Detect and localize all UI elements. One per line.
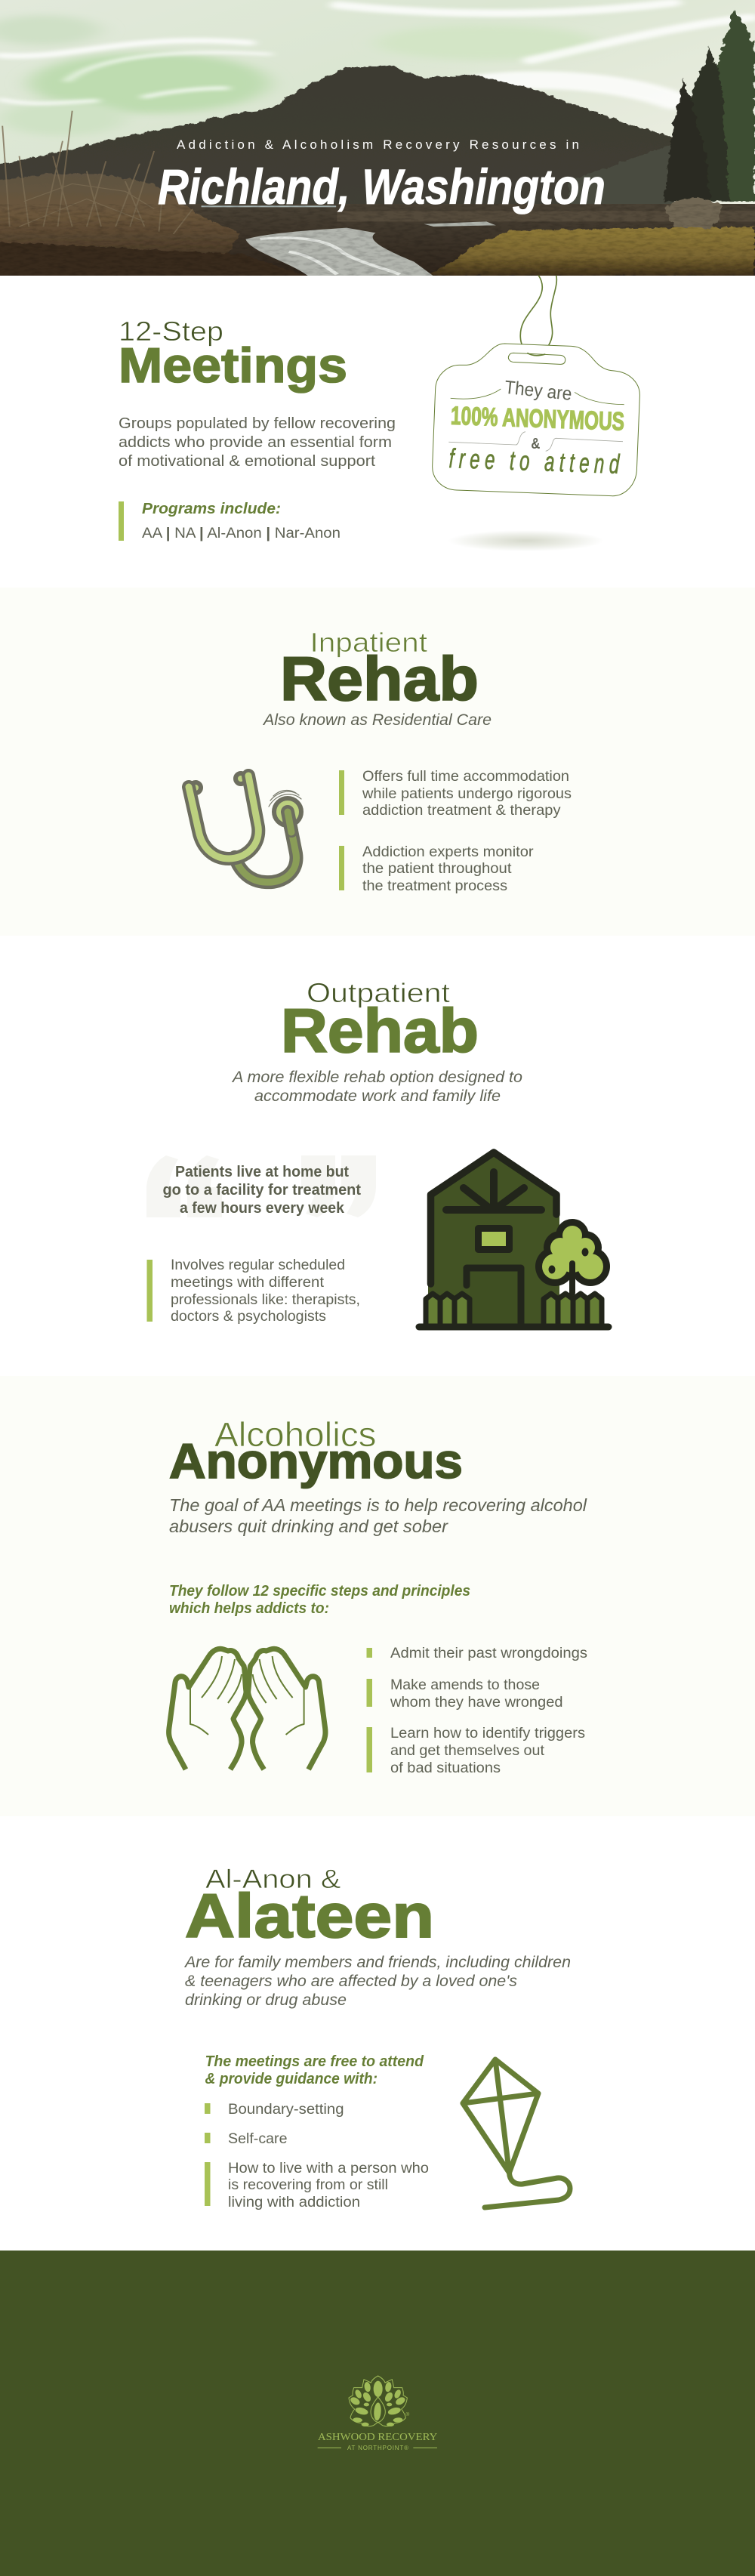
quote callout: go to a facility for treatment: [163, 1182, 361, 1199]
point: self-care: Self-care: [228, 2130, 287, 2147]
description: Groups populated by fellow recovering: [119, 415, 396, 432]
point: triggers: of bad situations: [390, 1760, 501, 1776]
point: make amends: Make amends to those: [390, 1677, 540, 1693]
point: accommodation: [339, 768, 572, 819]
point: accommodation: Offers full time accommodation: [362, 768, 569, 785]
heading: 12-Step: 12-Step: [119, 316, 223, 347]
panel: alcoholics anonymous: [0, 1376, 755, 1816]
point: triggers: and get themselves out: [390, 1742, 545, 1759]
heading: Alcoholics: Alcoholics: [214, 1415, 376, 1454]
hero photo: mountain landscape: [0, 0, 755, 276]
pine trees: [664, 10, 755, 202]
point: accommodation: addiction treatment & therapy: [362, 802, 561, 819]
icon: hanging tag: 100% ANONYMOUS: [450, 402, 625, 437]
icon: open hands: [169, 1649, 325, 1769]
icon: hanging tag: free to attend: [448, 443, 621, 480]
point: scheduled meetings: [146, 1257, 360, 1325]
logo: Ashwood Recovery at Northpoint: AT NORTHPOINT®: [347, 2445, 408, 2451]
description: Are for family members and friends, including children: [183, 1954, 571, 1971]
lead-in: The meetings are free to attend: [205, 2053, 424, 2070]
panel: hero: [0, 0, 755, 276]
heading: Alateen: Alateen: [185, 1882, 434, 1951]
icon: hanging tag: &: [531, 435, 540, 452]
heading: Rehab: Rehab: [280, 645, 479, 714]
quote callout: a few hours every week: [180, 1200, 345, 1217]
point: living with a person in recovery: living with addiction: [228, 2194, 360, 2210]
point: living with a person in recovery: How to live with a person who: [228, 2160, 429, 2176]
panel: footer: [0, 2251, 755, 2576]
point: make amends: [367, 1677, 563, 1711]
description: The goal of AA meetings is to help recovering alcohol: [169, 1495, 587, 1515]
description: abusers quit drinking and get sober: [169, 1516, 448, 1536]
point: boundary-setting: Boundary-setting: [228, 2101, 344, 2118]
description: [119, 415, 396, 470]
point: scheduled meetings: doctors & psychologists: [171, 1308, 326, 1325]
description: [183, 1954, 571, 2009]
heading: Outpatient: Outpatient: [307, 977, 450, 1008]
point: monitoring: the treatment process: [362, 878, 507, 894]
logo: Ashwood Recovery at Northpoint: [318, 2376, 437, 2451]
description: & teenagers who are affected by a loved one's: [185, 1973, 518, 1990]
point: monitoring: Addiction experts monitor: [362, 844, 534, 860]
lead-in: They follow 12 specific steps and principles: [169, 1583, 470, 1600]
heading: Meetings: Meetings: [119, 338, 347, 393]
point: admit wrongdoings: Admit their past wrongdoings: [390, 1645, 587, 1661]
lead-in: which helps addicts to:: [169, 1600, 329, 1617]
point: scheduled meetings: Involves regular scheduled: [171, 1257, 345, 1273]
point: triggers: [367, 1725, 585, 1776]
subtitle: A more flexible rehab option designed to: [231, 1069, 522, 1086]
heading: Inpatient: Inpatient: [310, 627, 427, 658]
hero title: Richland, Washington: [158, 159, 606, 214]
heading: Al-Anon &: Al-Anon &: [205, 1865, 341, 1894]
logo: Ashwood Recovery at Northpoint: ®: [405, 2411, 409, 2417]
panel: al-anon and alateen: [0, 1816, 755, 2251]
logo: Ashwood Recovery at Northpoint: ASHWOOD RECOVERY: [318, 2432, 437, 2443]
programs callout: Programs include:: [142, 501, 281, 517]
programs callout: [119, 501, 341, 541]
mountain: [0, 65, 674, 214]
point: living with a person in recovery: is recovering from or still: [228, 2176, 388, 2193]
description: [169, 1495, 587, 1536]
icon: hanging tag: [433, 276, 639, 551]
icon: hanging tag: They are: [504, 378, 573, 405]
panel: outpatient rehab: [0, 936, 755, 1376]
description: drinking or drug abuse: [185, 1991, 347, 2009]
left bush: [0, 174, 241, 255]
subtitle: [231, 1069, 522, 1105]
point: accommodation: while patients undergo rigorous: [362, 785, 572, 802]
point: monitoring: [339, 844, 534, 894]
description: addicts who provide an essential form: [119, 433, 392, 451]
point: monitoring: the patient throughout: [362, 860, 512, 877]
panel: 12-step meetings: [0, 276, 755, 588]
icon: house with tree: [419, 1151, 610, 1327]
panel: inpatient rehab: [0, 588, 755, 936]
quote callout: [146, 1155, 376, 1217]
icon: kite: [463, 2059, 570, 2207]
point: living with a person in recovery: [205, 2160, 429, 2210]
heading: Anonymous: Anonymous: [169, 1433, 463, 1489]
river: [245, 228, 433, 276]
point: triggers: Learn how to identify triggers: [390, 1725, 585, 1741]
programs callout: AA | NA | Al-Anon | Nar-Anon: [142, 526, 341, 541]
lead-in: & provide guidance with:: [205, 2071, 378, 2087]
subtitle: Also known as Residential Care: [262, 711, 492, 729]
water strip: [202, 205, 336, 207]
point: scheduled meetings: meetings with different: [171, 1274, 325, 1291]
quote callout: Patients live at home but: [175, 1164, 349, 1180]
icon: stethoscope: [189, 773, 301, 882]
point: make amends: whom they have wronged: [390, 1694, 563, 1711]
description: of motivational & emotional support: [119, 452, 375, 470]
heading: Rehab: Rehab: [281, 997, 479, 1066]
lead-in: [169, 1583, 470, 1617]
subtitle: accommodate work and family life: [254, 1087, 501, 1105]
hero subtitle: Addiction & Alcoholism Recovery Resources in: [177, 137, 579, 152]
lead-in: [205, 2053, 424, 2087]
point: scheduled meetings: professionals like: therapists,: [171, 1291, 360, 1308]
